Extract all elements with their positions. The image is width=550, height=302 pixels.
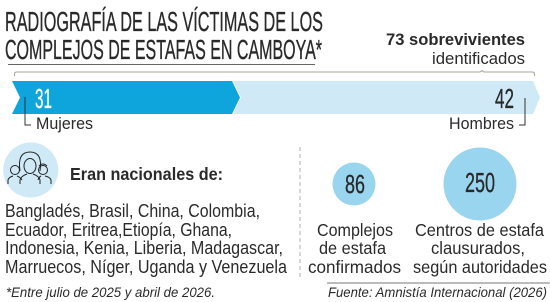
stat: closed centres <box>413 148 547 277</box>
footnote: *Entre julio de 2025 y abril de 2026. <box>6 284 215 300</box>
bracket <box>14 70 534 76</box>
bar: women <box>12 81 240 114</box>
women label <box>25 97 93 133</box>
total survivors <box>386 31 525 68</box>
title: COMPLEJOS DE ESTAFAS EN CAMBOYA* <box>5 34 322 65</box>
men count: 42 <box>495 83 514 114</box>
stat: closed centres: 250 <box>465 167 495 198</box>
stat: confirmed complexes: 86 <box>345 169 365 199</box>
men label: Hombres <box>449 114 514 133</box>
total survivors: identificados <box>432 50 525 68</box>
total survivors: 73 sobrevivientes <box>386 31 525 49</box>
nationalities heading: Eran nacionales de: <box>70 164 223 184</box>
icon: people <box>3 142 58 198</box>
country list: Indonesia, Kenia, Liberia, Madagascar, <box>5 238 283 258</box>
title <box>5 6 323 65</box>
stat: confirmed complexes <box>308 162 401 277</box>
country list: Bangladés, Brasil, China, Colombia, <box>5 201 260 221</box>
women label: Mujeres <box>36 114 93 133</box>
country list <box>5 201 288 277</box>
stat: confirmed complexes: de estafa <box>319 238 386 258</box>
stat: closed centres: Centros de estafa <box>415 220 544 240</box>
country list: Ecuador, Eritrea,Etiopía, Ghana, <box>5 220 232 240</box>
stat: closed centres: clausurados, <box>431 238 525 258</box>
stat: confirmed complexes: confirmados <box>308 257 401 277</box>
country list: Marruecos, Níger, Uganda y Venezuela <box>5 257 288 277</box>
stat: confirmed complexes: Complejos <box>317 220 393 240</box>
title: RADIOGRAFÍA DE LAS VÍCTIMAS DE LOS <box>5 6 323 37</box>
bar: men <box>233 81 540 114</box>
men label <box>449 98 525 133</box>
women count: 31 <box>35 83 52 114</box>
